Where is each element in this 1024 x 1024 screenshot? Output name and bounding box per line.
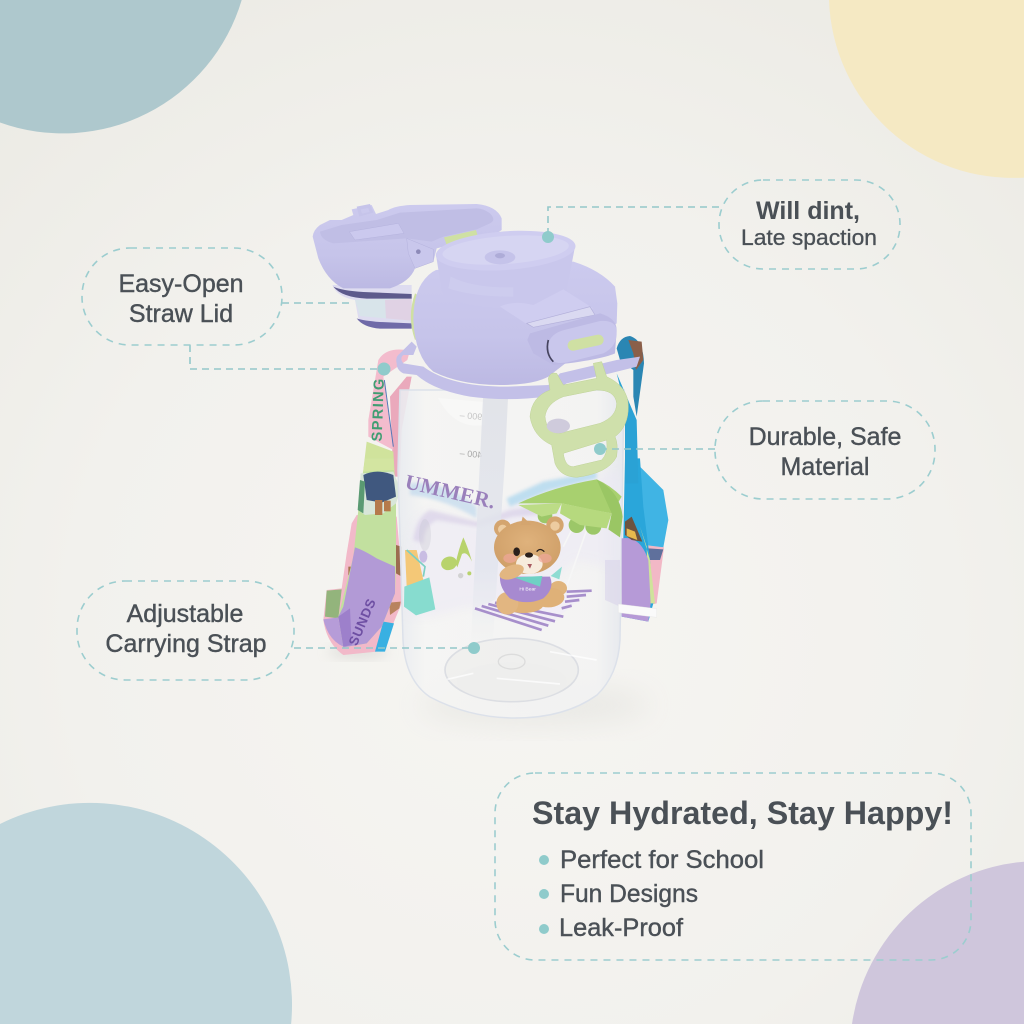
main lid and handle xyxy=(396,226,640,477)
lid body xyxy=(413,262,617,385)
bullet: designs: Fun Designs xyxy=(560,880,698,908)
bear arm xyxy=(497,561,526,583)
lid neck xyxy=(436,247,575,308)
bear head xyxy=(494,521,561,574)
leader line xyxy=(548,207,719,236)
panel border xyxy=(495,773,971,960)
body shell xyxy=(398,390,624,718)
pointer dot xyxy=(594,443,606,455)
left carrying strap, back loop xyxy=(323,515,402,655)
green handle xyxy=(530,362,628,477)
label text: Easy-Open xyxy=(118,270,244,298)
straw xyxy=(471,398,508,640)
bear shirt xyxy=(500,577,551,602)
lid bottom cup xyxy=(332,285,412,329)
strap loop flange xyxy=(396,342,640,399)
base of bottle xyxy=(445,638,597,702)
clip button xyxy=(548,321,617,363)
label text: Material xyxy=(781,453,869,481)
strap text: sunds: SUNDS xyxy=(346,596,379,648)
decorative circle: top right yellow xyxy=(829,0,1024,178)
label box xyxy=(82,248,282,345)
label text: Adjustable xyxy=(127,600,243,628)
right strap front xyxy=(622,458,655,622)
bear legs xyxy=(550,581,567,596)
callout: durable material xyxy=(594,401,935,499)
strap buckle xyxy=(618,604,657,617)
measurement marks: 900 – xyxy=(459,410,483,422)
callout: straw lid xyxy=(82,248,390,376)
clip button green pill xyxy=(567,334,605,352)
bottle body xyxy=(398,390,624,718)
label text: Carrying Strap xyxy=(105,630,267,658)
strap shadow xyxy=(328,646,388,658)
bullet: leak proof: Leak-Proof xyxy=(559,914,683,942)
back open lid xyxy=(313,204,502,329)
label text: Late spaction xyxy=(741,225,877,250)
label text: Will dint, xyxy=(756,197,860,225)
lid top rim xyxy=(434,226,577,275)
label box xyxy=(715,401,935,499)
blob seen through handle xyxy=(547,419,570,433)
left carrying strap, front band xyxy=(338,458,401,648)
product photo: water bottle with straps xyxy=(313,204,668,725)
callout: will dint xyxy=(542,180,900,269)
bottle body: 400 – xyxy=(459,448,483,460)
lid green band xyxy=(444,230,478,245)
icon: bear character xyxy=(494,516,567,615)
drinking spout xyxy=(485,250,515,264)
icon: music note xyxy=(439,537,472,578)
bear face xyxy=(513,547,520,556)
right carrying strap, back xyxy=(638,465,668,605)
label text: Straw Lid xyxy=(129,300,233,328)
panel: benefits summary xyxy=(495,773,971,960)
bear bandana xyxy=(514,576,542,587)
lid green side xyxy=(411,293,420,340)
printed text: summer: UMMER. xyxy=(403,469,498,514)
upper right strap xyxy=(617,336,644,483)
bear muzzle xyxy=(516,554,543,574)
icon: umbrella xyxy=(518,479,623,587)
lid inner recess xyxy=(320,208,493,243)
latch ramp xyxy=(500,289,593,324)
reflection patch xyxy=(460,412,482,420)
lid hinge xyxy=(407,238,433,268)
leader lines xyxy=(190,303,384,369)
label box xyxy=(77,581,294,680)
lid shell xyxy=(313,204,502,288)
bullet: school: Perfect for School xyxy=(560,846,764,874)
lid inner latch xyxy=(349,223,404,240)
decorative circle: bottom right purple xyxy=(852,862,1024,1024)
watercolor wash xyxy=(409,472,620,606)
panel heading: Stay Hydrated, Stay Happy! xyxy=(532,795,953,831)
leader line xyxy=(600,448,715,450)
bear ears xyxy=(494,520,511,537)
icon: bear character: Hi Bear xyxy=(519,587,536,593)
bottle shadow xyxy=(420,685,650,725)
pointer dot xyxy=(542,231,554,243)
clip housing xyxy=(527,313,617,365)
leader line xyxy=(294,647,474,649)
icon: striped blanket xyxy=(475,590,592,630)
pointer dot xyxy=(468,642,480,654)
left carrying strap, pink upper part xyxy=(362,349,412,480)
icon: drink bag xyxy=(404,550,435,615)
label text: Durable, Safe xyxy=(749,423,901,451)
decorative circle: top left teal xyxy=(0,0,242,133)
callout: carrying strap xyxy=(77,581,480,680)
pointer dot xyxy=(378,362,390,376)
label box xyxy=(719,180,900,269)
decorative circle: bottom left blue xyxy=(0,803,292,1024)
strap text: spring: SPRING xyxy=(370,377,388,442)
